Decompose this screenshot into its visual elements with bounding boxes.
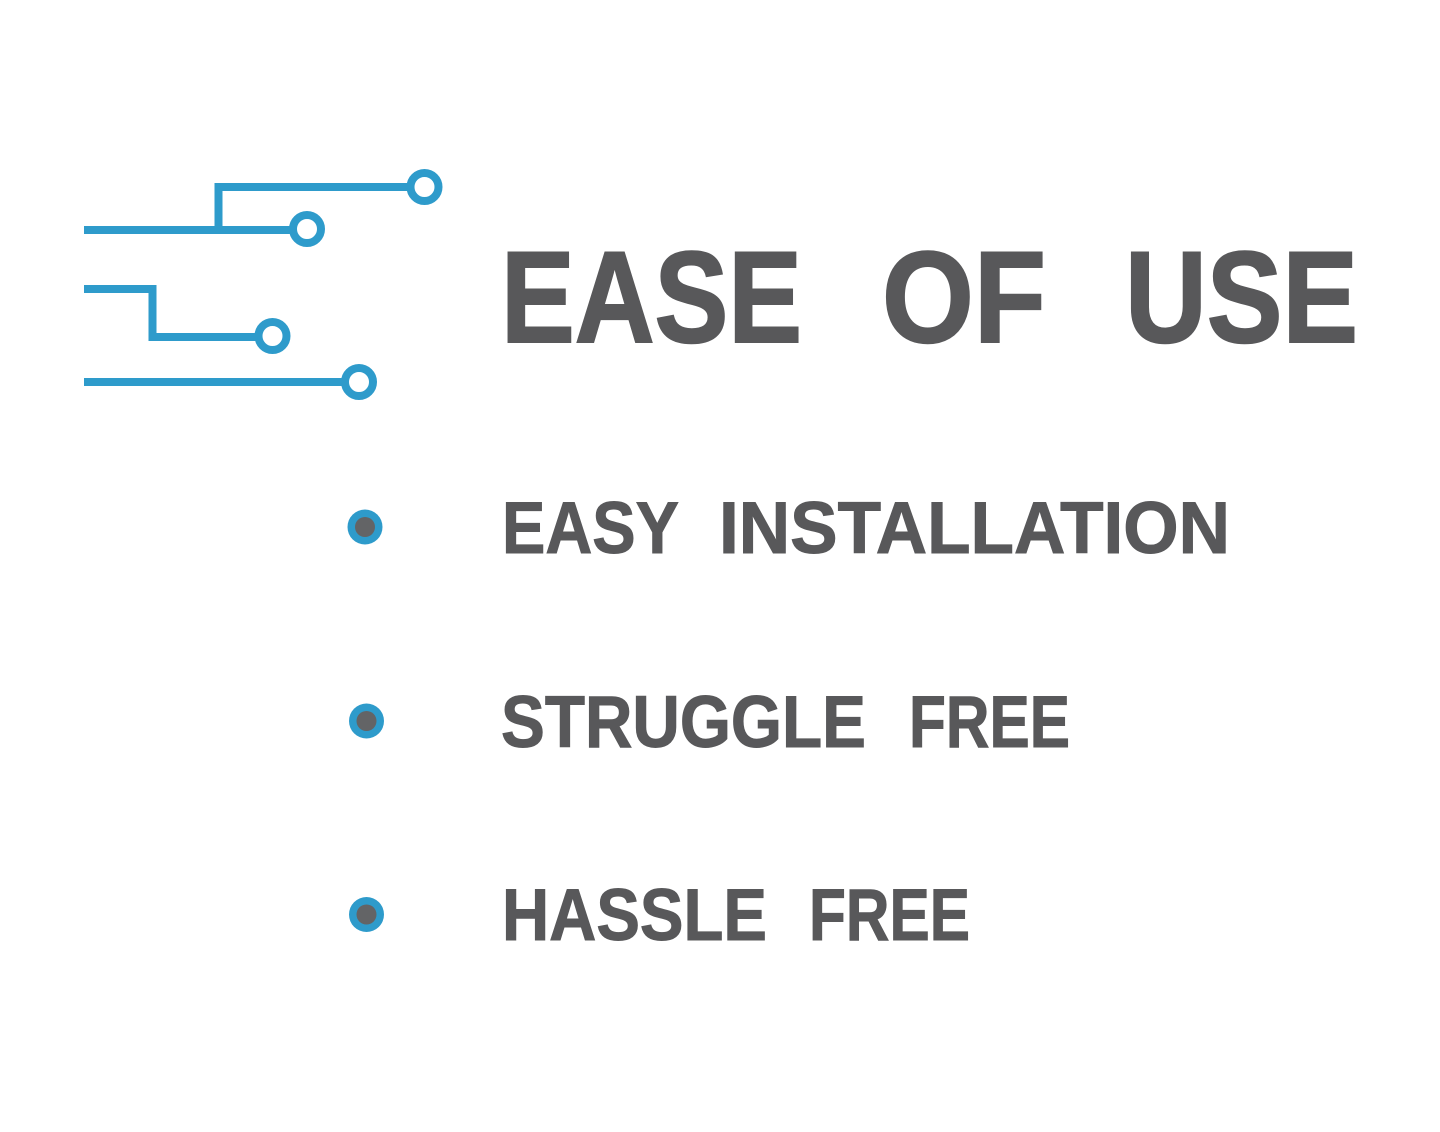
text: struggle free: FREE <box>909 682 1070 763</box>
text: hassle free <box>502 875 970 956</box>
title: EASE <box>501 224 802 370</box>
text: hassle free: HASSLE <box>502 875 767 956</box>
text: hassle free: FREE <box>809 875 970 956</box>
title <box>501 224 1358 370</box>
title: USE <box>1125 224 1358 370</box>
text: easy installation: INSTALLATION <box>719 488 1230 569</box>
circuit branch: straight line <box>84 368 373 396</box>
bullet: hassle free <box>349 897 384 932</box>
text: struggle free: STRUGGLE <box>501 682 866 763</box>
circuit branch: stepped line <box>84 289 286 350</box>
bullet: struggle free <box>349 704 384 738</box>
text: easy installation <box>502 488 1230 569</box>
bullet: easy installation <box>348 510 382 544</box>
text: easy installation: EASY <box>502 488 679 569</box>
circuit branch: upper pair <box>84 173 438 243</box>
title: OF <box>882 224 1046 370</box>
icon: circuit lines <box>84 173 438 396</box>
